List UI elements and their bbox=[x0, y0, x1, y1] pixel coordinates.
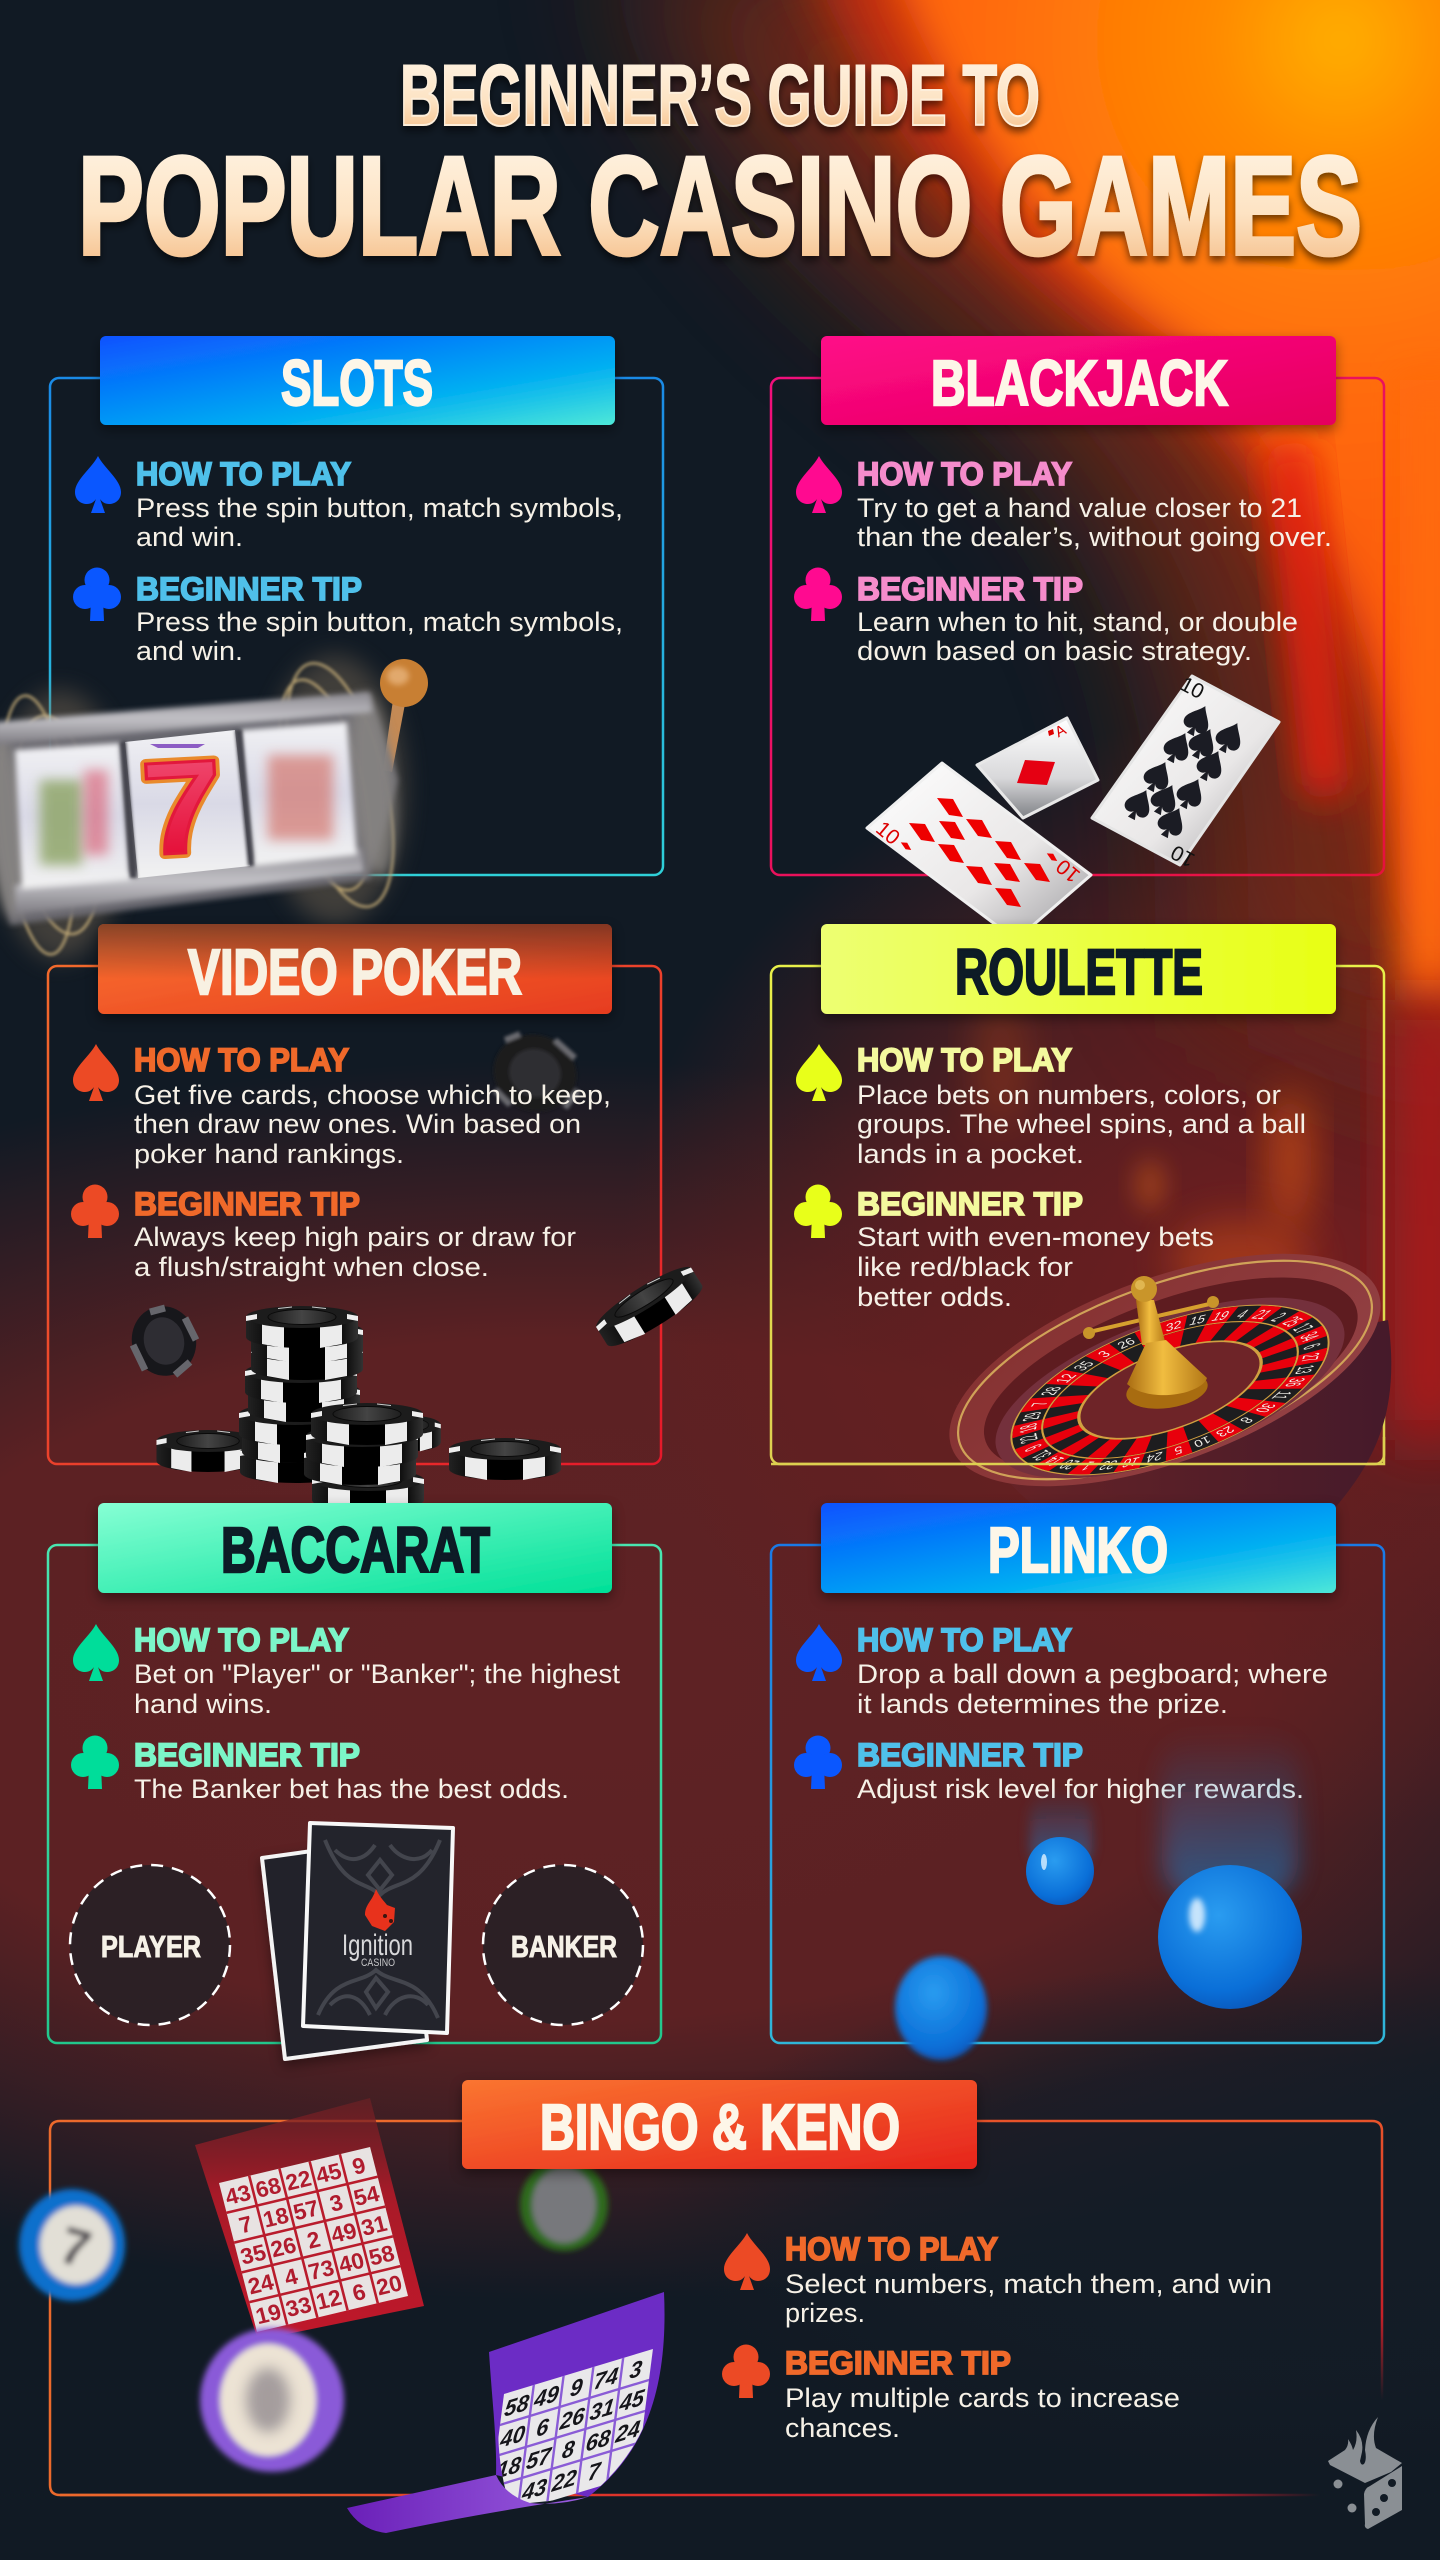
how to play text: HOW TO PLAY bbox=[785, 2231, 998, 2267]
wheel numbers: 35 bbox=[1070, 1360, 1099, 1372]
chip behind right bbox=[379, 1416, 441, 1451]
card: ten of spades: 10 bbox=[1167, 840, 1199, 871]
beginner tip text: Press the spin button, match symbols, bbox=[136, 607, 623, 637]
banner: video poker: VIDEO POKER bbox=[188, 936, 522, 1008]
how to play text: Try to get a hand value closer to 21 bbox=[857, 493, 1302, 523]
how to play text: then draw new ones. Win based on bbox=[134, 1109, 581, 1139]
icon: club bbox=[71, 1736, 119, 1789]
beginner tip text bbox=[134, 1737, 569, 1804]
banner: roulette bbox=[821, 924, 1336, 1014]
red bingo card: 54 bbox=[351, 2180, 382, 2211]
purple bingo card: 31 bbox=[588, 2393, 616, 2426]
player circle: PLAYER bbox=[101, 1929, 201, 1964]
panel: video poker bbox=[48, 924, 661, 1464]
beginner tip text: BEGINNER TIP bbox=[857, 1186, 1083, 1222]
bowl rim bbox=[920, 1206, 1410, 1534]
wheel numbers: 17 bbox=[1288, 1320, 1318, 1336]
player circle bbox=[70, 1865, 230, 2025]
panel border bbox=[771, 1545, 1384, 2043]
beginner tip text: Play multiple cards to increase bbox=[785, 2383, 1180, 2413]
bowl inner plate bbox=[973, 1260, 1367, 1516]
red bingo card: 33 bbox=[283, 2291, 314, 2322]
how to play text: Press the spin button, match symbols, bbox=[136, 493, 623, 523]
icon: club bbox=[794, 1184, 842, 1238]
how to play text: HOW TO PLAY bbox=[134, 1042, 349, 1078]
beginner tip text: BEGINNER TIP bbox=[136, 571, 362, 607]
ignition logo icon bbox=[365, 1889, 395, 1931]
wheel numbers: 31 bbox=[1026, 1447, 1057, 1464]
panel: plinko bbox=[771, 1503, 1384, 2043]
card: ten of diamonds: 10 bbox=[1052, 854, 1085, 887]
red bingo card: 6 bbox=[350, 2278, 368, 2306]
wheel numbers: 36 bbox=[1279, 1377, 1310, 1387]
red bingo card: 2 bbox=[304, 2226, 323, 2254]
blue bingo ball bbox=[19, 2189, 125, 2301]
red bingo card: 31 bbox=[358, 2210, 389, 2241]
how to play text: HOW TO PLAY bbox=[857, 1042, 1072, 1078]
purple bingo card: 6 bbox=[535, 2412, 551, 2442]
banker circle: BANKER bbox=[511, 1929, 617, 1964]
red bingo card: 9 bbox=[349, 2152, 368, 2180]
how to play text: Bet on "Player" or "Banker"; the highest bbox=[134, 1659, 621, 1689]
icon: spade bbox=[724, 2233, 770, 2290]
how to play text bbox=[857, 1622, 1328, 1719]
wheel numbers: 16 bbox=[1119, 1454, 1142, 1471]
how to play text: Select numbers, match them, and win bbox=[785, 2269, 1272, 2299]
wheel numbers: 11 bbox=[1266, 1391, 1296, 1400]
banner: video poker bbox=[98, 924, 612, 1014]
wheel ring with pockets bbox=[989, 1269, 1351, 1511]
icon: spade bbox=[796, 456, 842, 513]
banker circle bbox=[483, 1865, 643, 2025]
wheel numbers: 19 bbox=[1208, 1309, 1232, 1325]
wheel numbers: 29 bbox=[1017, 1410, 1047, 1423]
purple bingo card: 22 bbox=[550, 2464, 579, 2497]
panel: roulette bbox=[771, 924, 1384, 1464]
purple bingo card: 40 bbox=[498, 2420, 527, 2453]
wheel numbers: 25 bbox=[1277, 1313, 1308, 1330]
how to play text bbox=[134, 1042, 611, 1169]
panel border bbox=[50, 2121, 1382, 2495]
wheel numbers: 30 bbox=[1250, 1402, 1279, 1413]
banner: bingo and keno bbox=[462, 2080, 977, 2169]
wheel numbers: 9 bbox=[1020, 1441, 1047, 1454]
red bingo card: 22 bbox=[283, 2165, 314, 2196]
beginner tip text: and win. bbox=[136, 636, 243, 666]
lever bbox=[380, 659, 428, 772]
how to play text: groups. The wheel spins, and a ball bbox=[857, 1109, 1306, 1139]
panel border bbox=[771, 378, 1384, 875]
wheel numbers: 26 bbox=[1114, 1335, 1138, 1351]
beginner tip text: like red/black for bbox=[857, 1252, 1073, 1282]
small ball with trail bbox=[1026, 1790, 1094, 1905]
machine body bbox=[0, 695, 398, 925]
wheel numbers: 4 bbox=[1232, 1307, 1252, 1322]
large ball with trail bbox=[1158, 1730, 1302, 2009]
playing cards illustration bbox=[867, 673, 1279, 940]
panel border bbox=[48, 1545, 661, 2043]
wheel numbers: 14 bbox=[1038, 1453, 1069, 1469]
icon: spade bbox=[796, 1044, 842, 1101]
wheel numbers: 28 bbox=[1036, 1387, 1067, 1396]
icon: club bbox=[71, 1184, 119, 1238]
flying chip bbox=[591, 1259, 708, 1354]
beginner tip text: Learn when to hit, stand, or double bbox=[857, 607, 1298, 637]
card ornaments bbox=[318, 1840, 440, 2018]
banner: slots bbox=[100, 336, 615, 425]
beginner tip text: Start with even-money bets bbox=[857, 1222, 1214, 1252]
banner: slots: SLOTS bbox=[281, 347, 433, 419]
banner: blackjack bbox=[821, 336, 1336, 425]
wheel numbers: 32 bbox=[1165, 1317, 1182, 1334]
how to play text: HOW TO PLAY bbox=[134, 1622, 349, 1658]
wheel numbers: 8 bbox=[1236, 1415, 1258, 1425]
purple bingo ball bbox=[200, 2328, 344, 2472]
chip on right bbox=[449, 1438, 561, 1480]
how to play text bbox=[134, 1622, 621, 1719]
red bingo card: 20 bbox=[374, 2269, 405, 2300]
banner: blackjack: BLACKJACK bbox=[931, 347, 1228, 419]
icon: club bbox=[794, 1736, 842, 1789]
beginner tip text bbox=[134, 1186, 576, 1282]
beginner tip text: BEGINNER TIP bbox=[857, 571, 1083, 607]
purple bingo card: 3 bbox=[628, 2354, 644, 2384]
wheel numbers: 15 bbox=[1187, 1312, 1208, 1328]
banner: bingo and keno: BINGO & KENO bbox=[540, 2091, 900, 2163]
wheel numbers: 20 bbox=[1055, 1456, 1085, 1472]
how to play text: lands in a pocket. bbox=[857, 1139, 1084, 1169]
how to play text: poker hand rankings. bbox=[134, 1139, 404, 1169]
how to play text: HOW TO PLAY bbox=[857, 1622, 1072, 1658]
beginner tip text bbox=[857, 1737, 1304, 1804]
poker chips illustration bbox=[124, 1259, 708, 1511]
red bingo card: 12 bbox=[313, 2284, 344, 2315]
wheel numbers: 27 bbox=[1296, 1351, 1325, 1364]
card: ten of spades bbox=[1092, 673, 1279, 871]
ignition cards bbox=[262, 1823, 453, 2059]
purple bingo card: 8 bbox=[561, 2434, 576, 2464]
beginner tip text: BEGINNER TIP bbox=[134, 1737, 360, 1773]
front card bbox=[303, 1823, 453, 2033]
beginner tip text bbox=[785, 2345, 1180, 2443]
beginner tip text bbox=[857, 571, 1298, 666]
wheel numbers: 34 bbox=[1295, 1329, 1324, 1345]
how to play text bbox=[857, 1042, 1306, 1169]
purple bingo card: 74 bbox=[592, 2362, 620, 2395]
panel: slots bbox=[50, 336, 663, 875]
banner: baccarat: BACCARAT bbox=[221, 1514, 490, 1586]
small dark chip bbox=[124, 1299, 204, 1383]
red bingo card: 7 bbox=[236, 2210, 255, 2238]
panel border bbox=[50, 378, 663, 875]
beginner tip text: Always keep high pairs or draw for bbox=[134, 1222, 576, 1252]
how to play text: HOW TO PLAY bbox=[136, 456, 351, 492]
wheel numbers: 1 bbox=[1078, 1458, 1099, 1472]
card: ace of diamonds: A bbox=[1052, 721, 1069, 741]
card: ten of diamonds bbox=[867, 763, 1091, 940]
how to play text bbox=[857, 456, 1332, 552]
spinning rings bbox=[0, 653, 414, 958]
icon: spade bbox=[75, 456, 121, 513]
title line 1: BEGINNER’S GUIDE TO bbox=[400, 48, 1040, 144]
purple bingo card: 49 bbox=[532, 2380, 561, 2413]
how to play text: it lands determines the prize. bbox=[857, 1689, 1228, 1719]
beginner tip text: a flush/straight when close. bbox=[134, 1252, 489, 1282]
beginner tip text: down based on basic strategy. bbox=[857, 636, 1252, 666]
beginner tip text bbox=[136, 571, 623, 666]
wheel numbers: 10 bbox=[1191, 1434, 1213, 1450]
wheel numbers: 6 bbox=[1299, 1341, 1325, 1352]
beginner tip text: The Banker bet has the best odds. bbox=[134, 1774, 569, 1804]
wheel numbers: 18 bbox=[1015, 1421, 1042, 1435]
wheel numbers: 22 bbox=[1015, 1431, 1043, 1446]
wheel numbers: 3 bbox=[1094, 1349, 1114, 1359]
red bingo card: 26 bbox=[268, 2231, 299, 2262]
beginner tip text: BEGINNER TIP bbox=[134, 1186, 360, 1222]
how to play text: Place bets on numbers, colors, or bbox=[857, 1080, 1281, 1110]
card: ace of diamonds bbox=[977, 718, 1098, 818]
beginner tip text: BEGINNER TIP bbox=[857, 1737, 1083, 1773]
icon: spade bbox=[73, 1044, 119, 1101]
chip stack two bbox=[304, 1403, 424, 1511]
purple bingo card: 18 bbox=[495, 2451, 523, 2484]
purple bingo card bbox=[347, 2292, 665, 2533]
icon: spade bbox=[73, 1624, 119, 1681]
how to play text: and win. bbox=[136, 522, 243, 552]
purple bingo card: 9 bbox=[569, 2372, 584, 2402]
card: ten of spades: 10 bbox=[1176, 673, 1208, 704]
beginner tip text bbox=[857, 1186, 1214, 1312]
wheel numbers: 24 bbox=[1145, 1449, 1164, 1466]
red bingo card: 18 bbox=[260, 2202, 291, 2233]
panel: blackjack bbox=[771, 336, 1384, 875]
wheel numbers: 23 bbox=[1213, 1424, 1238, 1439]
red bingo card: 4 bbox=[282, 2263, 301, 2291]
bowl base bbox=[956, 1320, 1391, 1525]
red bingo card: 40 bbox=[336, 2247, 367, 2278]
purple bingo card: 26 bbox=[558, 2402, 587, 2435]
card: ten of diamonds: 10 bbox=[871, 817, 904, 850]
wheel numbers bbox=[994, 1273, 1346, 1508]
red bingo card: 45 bbox=[313, 2157, 344, 2188]
beginner tip text: BEGINNER TIP bbox=[785, 2345, 1011, 2381]
wheel numbers: 21 bbox=[1247, 1307, 1276, 1322]
how to play text: Drop a ball down a pegboard; where bbox=[857, 1659, 1328, 1689]
how to play text bbox=[785, 2231, 1272, 2328]
wheel numbers: 13 bbox=[1289, 1364, 1320, 1376]
red bingo card: 3 bbox=[327, 2189, 346, 2217]
wheel numbers: 33 bbox=[1096, 1457, 1122, 1472]
blurred flying chip bbox=[483, 1023, 587, 1123]
panel: baccarat bbox=[48, 1503, 661, 2059]
red bingo card: 19 bbox=[253, 2298, 284, 2329]
how to play text bbox=[136, 456, 623, 552]
roulette wheel illustration bbox=[771, 1206, 1410, 1534]
chip behind left bbox=[156, 1430, 260, 1472]
red bingo card: 24 bbox=[245, 2268, 277, 2299]
how to play text: HOW TO PLAY bbox=[857, 456, 1072, 492]
red bingo card: 35 bbox=[238, 2239, 269, 2270]
lucky seven: 7 bbox=[138, 732, 226, 884]
how to play text: hand wins. bbox=[134, 1689, 272, 1719]
icon: spade bbox=[796, 1624, 842, 1681]
wheel numbers: 2 bbox=[1266, 1310, 1291, 1325]
icon: club bbox=[722, 2344, 770, 2398]
plinko balls bbox=[895, 1730, 1302, 2060]
golden spindle bbox=[1083, 1276, 1219, 1414]
beginner tip text: better odds. bbox=[857, 1282, 1012, 1312]
ignition wordmark: Ignition bbox=[342, 1929, 413, 1962]
icon: club bbox=[794, 568, 842, 621]
panel border bbox=[771, 966, 1384, 1464]
slot machine illustration bbox=[0, 653, 428, 960]
red bingo card: 43 bbox=[222, 2179, 253, 2210]
purple bingo card: 58 bbox=[503, 2389, 531, 2422]
banner: roulette: ROULETTE bbox=[955, 936, 1203, 1008]
wheel numbers: 7 bbox=[1026, 1401, 1054, 1407]
red bingo card bbox=[195, 2098, 424, 2340]
how to play text: prizes. bbox=[785, 2298, 865, 2328]
wheel numbers: 12 bbox=[1051, 1373, 1082, 1384]
title bbox=[78, 48, 1362, 284]
purple bingo card: 43 bbox=[520, 2473, 549, 2506]
red bingo card: 68 bbox=[253, 2172, 284, 2203]
banner: baccarat bbox=[98, 1503, 612, 1593]
green bingo ball bbox=[520, 2159, 608, 2251]
panel border bbox=[48, 966, 661, 1464]
red bingo card: 58 bbox=[366, 2240, 397, 2271]
icon: club bbox=[73, 568, 121, 621]
purple bingo card: 68 bbox=[584, 2424, 612, 2457]
banner: plinko: PLINKO bbox=[988, 1514, 1168, 1586]
how to play text: than the dealer’s, without going over. bbox=[857, 522, 1332, 552]
beginner tip text: chances. bbox=[785, 2413, 900, 2443]
red bingo card: 57 bbox=[290, 2194, 321, 2225]
red bingo card: 73 bbox=[306, 2254, 337, 2285]
lower blurred ball bbox=[895, 1956, 987, 2060]
back card bbox=[262, 1838, 427, 2059]
how to play text: Get five cards, choose which to keep, bbox=[134, 1080, 611, 1110]
lucky seven: 7 bbox=[138, 732, 226, 884]
reels bbox=[15, 722, 357, 889]
roulette border bottom overlay bbox=[771, 1437, 1384, 1464]
banner: plinko bbox=[821, 1503, 1336, 1593]
beginner tip text: Adjust risk level for higher rewards. bbox=[857, 1774, 1304, 1804]
purple bingo card: 24 bbox=[613, 2415, 642, 2448]
wheel numbers: 5 bbox=[1174, 1443, 1183, 1458]
panel: bingo and keno bbox=[19, 2080, 1382, 2533]
chip stack one bbox=[239, 1306, 363, 1483]
casino wordmark: CASINO bbox=[361, 1957, 395, 1969]
purple bingo card: 7 bbox=[587, 2456, 603, 2486]
purple bingo card: 57 bbox=[525, 2441, 554, 2475]
purple bingo card: 45 bbox=[617, 2384, 646, 2417]
blue bingo ball: 7 bbox=[54, 2216, 97, 2280]
icon: flaming dice logo bbox=[1328, 2417, 1402, 2529]
red bingo card: 49 bbox=[328, 2217, 359, 2248]
